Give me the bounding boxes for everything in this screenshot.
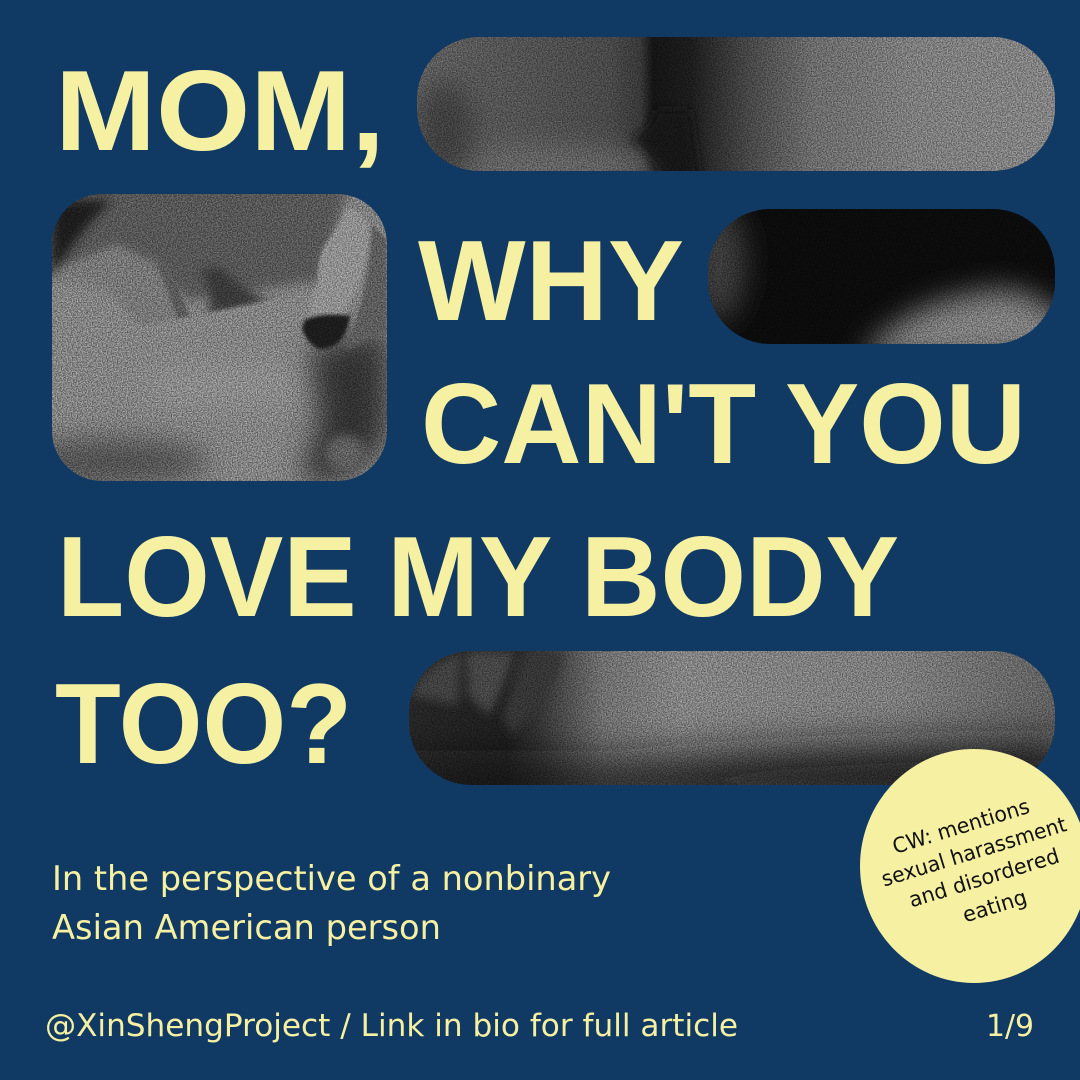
content warning badge: [860, 749, 1080, 983]
footer credit: @XinShengProject / Link in bio for full article: [45, 1008, 738, 1044]
title: LOVE MY BODY: LOVE MY BODY: [57, 514, 899, 641]
badge text: [870, 785, 1080, 947]
photo: left rounded square, hand and torso: [52, 194, 387, 481]
photo: dark pill, shadowed curve: [708, 209, 1055, 344]
title: CAN'T YOU: CAN'T YOU: [421, 361, 1026, 488]
page number: 1/9: [986, 1009, 1034, 1044]
subtitle: [52, 859, 611, 948]
badge text: and disordered: [906, 844, 1062, 912]
badge text: sexual harassment: [879, 812, 1069, 891]
title: TOO?: TOO?: [55, 661, 352, 788]
title: MOM,: MOM,: [55, 48, 385, 175]
badge text: CW: mentions: [890, 794, 1032, 859]
badge text: eating: [960, 885, 1030, 927]
photo: bottom pill, arm and fingers: [409, 651, 1055, 785]
subtitle: In the perspective of a nonbinary: [52, 859, 611, 899]
photo: top pill, skin fold: [417, 37, 1055, 171]
badge circle: [860, 749, 1080, 983]
subtitle: Asian American person: [52, 908, 441, 948]
title: WHY: WHY: [418, 218, 684, 345]
